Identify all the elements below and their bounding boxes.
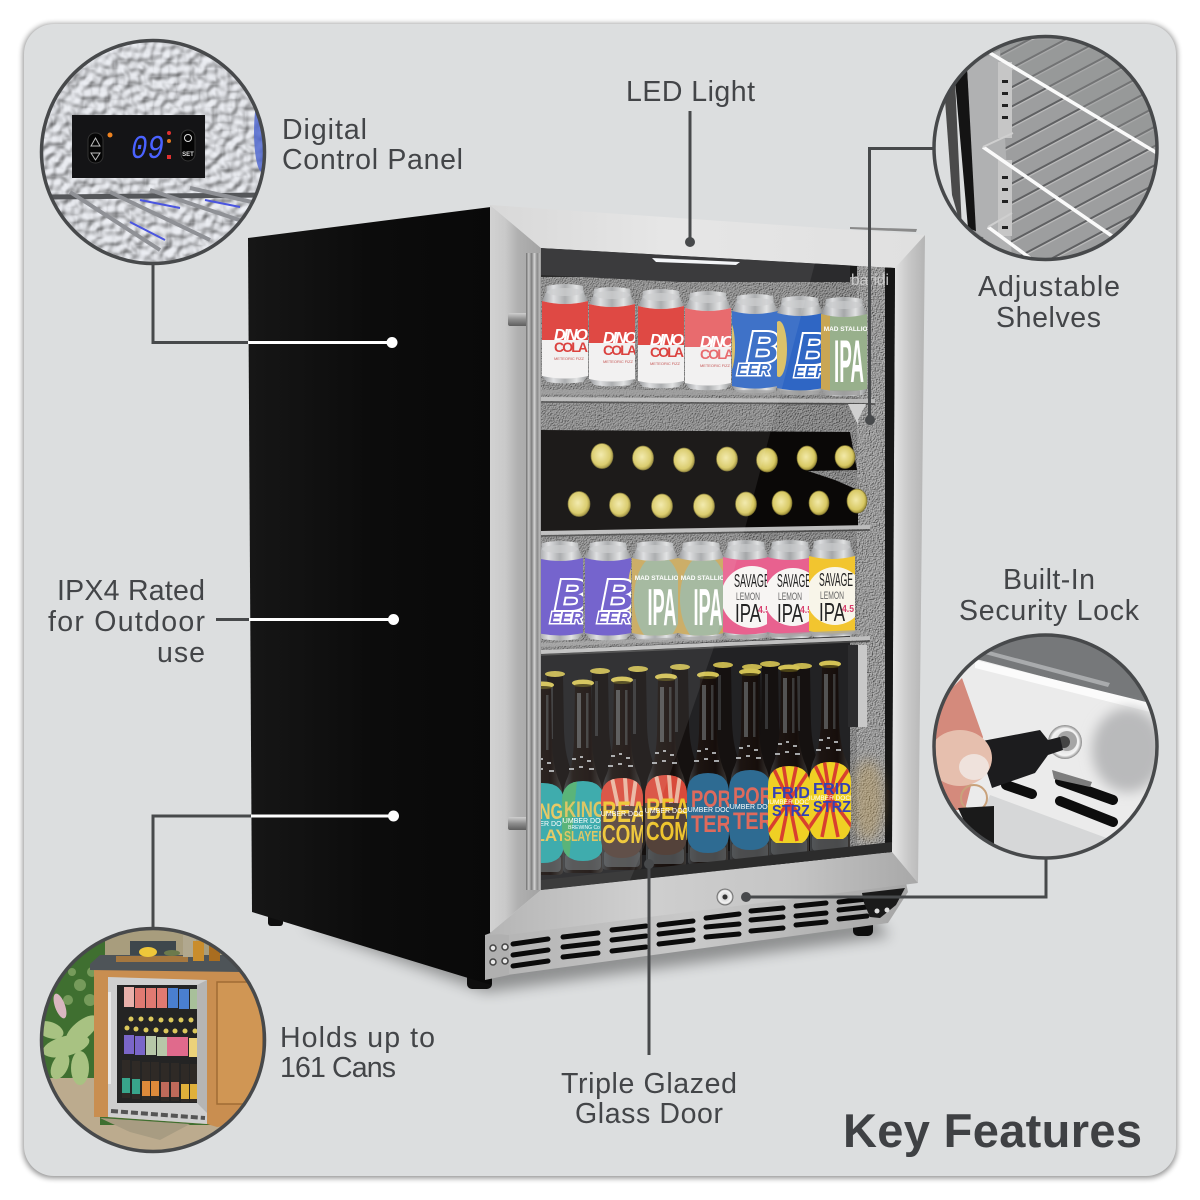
can: dino cola: COLA <box>603 342 637 358</box>
can: savage lemon pink <box>767 540 811 639</box>
mini vent <box>111 1111 205 1118</box>
right rack strip <box>848 645 867 727</box>
shelf row 2 wires <box>541 527 870 536</box>
bottle: friday strike: STRZ <box>813 799 851 816</box>
bottle: bear comet: COM <box>646 816 690 846</box>
glass shine <box>985 650 1110 687</box>
bottle: king slayer: HUMBER DOCK <box>558 818 611 825</box>
fridge floor shadow <box>300 915 890 992</box>
bottle: king slayer cut <box>541 682 563 875</box>
left frame strips <box>945 80 962 230</box>
shelf wires <box>50 188 270 250</box>
vent strip <box>485 878 908 980</box>
panel: fridge <box>248 205 925 989</box>
can: dino cola <box>637 289 685 388</box>
shelf row 3 cans: IPA <box>694 579 722 637</box>
pale flowers <box>51 992 69 1020</box>
bottle row lower caps <box>568 489 867 518</box>
shelf row 1 wires <box>541 392 875 404</box>
interior base <box>541 248 895 890</box>
dark glass top <box>930 632 1162 708</box>
bottle: bear comet: BEA <box>646 793 690 826</box>
glass door interior: IPA <box>834 328 864 395</box>
blue glow <box>254 92 270 172</box>
rack strip <box>998 62 1012 236</box>
warm reflection <box>852 760 884 840</box>
dark lower rear <box>541 636 850 880</box>
door lock <box>717 889 733 905</box>
bottle: porter <box>725 668 778 862</box>
label: triple glazed glass door: Glass Door <box>575 1098 724 1130</box>
thumb <box>928 730 992 786</box>
bottle: porter: HUMBER DOCK <box>683 807 736 814</box>
mini bottles <box>122 1060 197 1102</box>
wooden cabinet <box>94 968 270 1127</box>
panel indicator dot <box>108 132 112 138</box>
left wall <box>967 50 1012 260</box>
can: savage lemon yellow: SAVAGE <box>819 570 853 590</box>
back bottles <box>535 661 822 860</box>
lock tab <box>1052 770 1092 787</box>
fridge side panel <box>248 207 491 985</box>
mini fridge <box>108 977 207 1124</box>
glass door interior <box>519 248 897 892</box>
can: savage lemon pink: IPA <box>777 598 803 628</box>
fridge top tab <box>850 227 917 232</box>
bottle: porter: HUMBER DOCK <box>725 804 778 811</box>
bottle: friday strike: HUMBER DOCK <box>806 795 855 802</box>
label: adjustable shelves: Shelves <box>996 302 1101 334</box>
can: savage lemon pink: LEMON <box>736 591 760 603</box>
label: ipx4 rated: for Outdoor <box>48 606 206 638</box>
bottle: friday strike: HUMBER DOCK <box>765 799 814 806</box>
bottle rack dark backdrop <box>541 430 858 532</box>
can: savage lemon pink: 4.5 <box>800 605 812 616</box>
label: ipx4 rated <box>48 575 206 669</box>
panel arrow keys <box>88 133 103 163</box>
label: adjustable shelves: Adjustable <box>978 271 1120 303</box>
counter top <box>90 955 242 972</box>
can: savage lemon yellow <box>809 539 855 638</box>
can: beer <box>777 296 822 396</box>
shelf row 3 wires <box>541 632 870 655</box>
hosta leaves <box>34 1010 103 1085</box>
can: ipa: MAD STALLION <box>635 575 684 582</box>
bottle: king slayer <box>562 680 603 873</box>
leader: digital control panel <box>153 265 398 348</box>
drink glasses <box>183 935 220 961</box>
bottle: porter: TER <box>691 811 731 838</box>
can: dino cola: DINO <box>603 330 638 347</box>
mini handle <box>108 992 111 1084</box>
key head <box>977 730 1063 788</box>
mini bottle caps <box>124 1016 198 1034</box>
can: dino cola: DINO <box>700 334 735 351</box>
bottle: king slayer cut: KING <box>523 799 563 824</box>
white shelf rails <box>983 53 1157 258</box>
background wall <box>105 925 275 965</box>
blue shelf streaks <box>130 200 240 240</box>
can: ipa <box>678 541 724 640</box>
can: savage lemon pink <box>723 540 768 640</box>
can: beer purple: EER <box>597 610 630 627</box>
bush highlights <box>63 967 97 1006</box>
bottle: friday strike: STRZ <box>772 803 810 820</box>
can: savage lemon yellow: IPA <box>819 597 845 627</box>
right wall <box>857 265 885 865</box>
bottle: bear comet: HUMBER DOCK <box>640 808 693 815</box>
can: dino cola: METEORIC FIZZ <box>650 361 681 366</box>
can: beer purple <box>541 541 583 640</box>
upper shelf backing <box>990 40 1157 155</box>
white door edge <box>975 660 1150 712</box>
label: adjustable shelves <box>978 271 1120 334</box>
label: ipx4 rated: IPX4 Rated <box>57 575 205 607</box>
bottle: porter <box>687 672 729 864</box>
can: ipa <box>632 541 678 640</box>
bottle: friday strike: FRID <box>772 785 810 802</box>
can: dino cola <box>541 284 589 384</box>
glass floor strip <box>541 842 892 892</box>
can: ipa <box>821 297 867 396</box>
black frame strip <box>955 66 978 232</box>
label: built-in security lock <box>959 564 1140 627</box>
label: digital control panel: Control Panel <box>282 144 463 176</box>
can: beer purple: EER <box>550 610 583 627</box>
shelf row 1 cans <box>541 284 873 396</box>
label: holds up to 161 cans: Holds up to <box>280 1022 435 1054</box>
can: savage lemon pink: SAVAGE <box>734 571 770 591</box>
label: triple glazed glass door: Triple Glazed <box>561 1068 737 1100</box>
shelf row 3 cans: IPA <box>648 579 676 637</box>
backsplash <box>130 941 176 955</box>
callout: adjustable shelves image <box>930 34 1162 266</box>
bottle: king slayer cut: HUMBER DOCK <box>519 821 572 828</box>
shelf row 3 cans <box>536 539 864 643</box>
can: ipa: MAD STALLION <box>824 326 873 333</box>
back wall <box>541 277 871 877</box>
label: built-in security lock: Built-In <box>1003 564 1095 596</box>
ground shadow <box>100 1118 190 1140</box>
can: dino cola: METEORIC FIZZ <box>554 356 585 361</box>
corner bracket <box>862 888 905 918</box>
title: key features: Key Features <box>843 1104 1142 1157</box>
bottle: bear comet: HUMBER DOCK <box>596 811 649 818</box>
can: beer: EER <box>737 362 770 379</box>
label: digital control panel <box>282 114 463 176</box>
leader: LED light <box>685 111 695 247</box>
bottle: king slayer: KING <box>564 797 606 822</box>
can: dino cola: METEORIC FIZZ <box>700 363 731 368</box>
right glass edge <box>885 268 895 853</box>
fridge feet <box>268 908 873 989</box>
leader: glass door <box>644 859 654 1055</box>
bottle row upper caps <box>591 444 855 472</box>
bottle: friday strike <box>765 664 814 858</box>
label: ipx4 rated: use <box>157 637 205 669</box>
leader: security lock <box>741 858 1046 902</box>
label: holds up to 161 cans: 161 Cans <box>280 1052 396 1084</box>
temperature digits: 09 <box>131 131 164 168</box>
cabinet door panel <box>217 982 263 1104</box>
can: beer purple: B <box>602 571 634 620</box>
bottle: king slayer: SLAYER <box>564 828 606 845</box>
can: dino cola <box>588 287 638 386</box>
status icons <box>167 131 171 159</box>
can: dino cola: METEORIC FIZZ <box>603 359 634 364</box>
LED strip <box>652 258 740 265</box>
can: savage lemon pink: IPA <box>735 598 761 628</box>
door frame <box>490 205 925 935</box>
callout: outdoor installation image <box>34 925 275 1160</box>
label: digital control panel: Digital <box>282 114 367 146</box>
can: dino cola: COLA <box>554 339 588 355</box>
power and set buttons: SET <box>182 152 194 158</box>
mini cans row 3 <box>124 1035 197 1057</box>
leader: adjustable shelves <box>865 148 933 425</box>
can: savage lemon yellow: LEMON <box>820 590 844 602</box>
can: beer <box>732 294 778 394</box>
bottle: porter: POR <box>691 786 731 813</box>
leader: holds cans <box>153 810 399 928</box>
can: savage lemon pink: 4.5 <box>758 605 770 616</box>
cutting board and lemons <box>116 947 188 962</box>
callout: digital control panel image <box>38 37 270 269</box>
shelf side wires <box>983 133 1013 227</box>
stone ground <box>38 1078 270 1160</box>
bottle: bear comet <box>601 676 643 870</box>
glass reflection <box>541 248 815 892</box>
shelf bracket <box>848 404 866 425</box>
label: triple glazed glass door <box>561 1068 737 1130</box>
door handle <box>508 253 540 890</box>
bottle: bear comet: BEA <box>602 796 646 829</box>
vent slots <box>1006 781 1113 822</box>
callout: security lock image <box>928 632 1164 865</box>
can: dino cola <box>684 291 735 390</box>
control panel <box>72 115 205 178</box>
can: beer purple: B <box>555 571 587 620</box>
label: led light: LED Light <box>626 76 755 108</box>
interior ceiling <box>541 248 850 282</box>
left white sliver <box>930 34 970 266</box>
bottle: friday strike: FRID <box>813 781 851 798</box>
can: dino cola: COLA <box>650 344 684 360</box>
label: holds up to 161 cans <box>280 1022 435 1084</box>
brushed steel patch <box>1092 708 1164 792</box>
can: dino cola: COLA <box>700 346 734 362</box>
can: dino cola: DINO <box>554 327 589 344</box>
can: beer: EER <box>794 364 827 381</box>
mini cans row 1 <box>124 987 197 1009</box>
can: beer purple <box>585 541 631 640</box>
vent slots <box>513 899 867 966</box>
can: savage lemon pink: LEMON <box>778 591 802 603</box>
label: built-in security lock: Security Lock <box>959 595 1140 627</box>
leader: ipx4 <box>216 614 399 625</box>
brand logo: baridi <box>851 272 889 289</box>
can: ipa: MAD STALLION <box>681 575 730 582</box>
bottle: porter: POR <box>733 783 773 810</box>
can: savage lemon pink: SAVAGE <box>777 571 811 591</box>
bottle: bear comet <box>645 674 687 867</box>
hand finger <box>930 678 983 810</box>
can: beer: B <box>797 325 829 374</box>
bottle: friday strike <box>806 660 855 854</box>
bottle: king slayer cut: SLAY <box>523 826 568 845</box>
can: beer: B <box>747 323 779 372</box>
lower steel band <box>960 795 1112 865</box>
bottle: king slayer: BREWING Co <box>568 825 600 831</box>
mini frame right <box>197 980 207 1113</box>
can: savage lemon yellow: 4.5 <box>842 604 854 615</box>
can: dino cola: DINO <box>650 332 685 349</box>
lock cylinder <box>1048 725 1082 759</box>
bottle: bear comet: COM <box>602 819 646 849</box>
bottle: porter: TER <box>733 808 773 835</box>
screw plate <box>485 933 509 980</box>
key ring and tag <box>958 785 994 850</box>
